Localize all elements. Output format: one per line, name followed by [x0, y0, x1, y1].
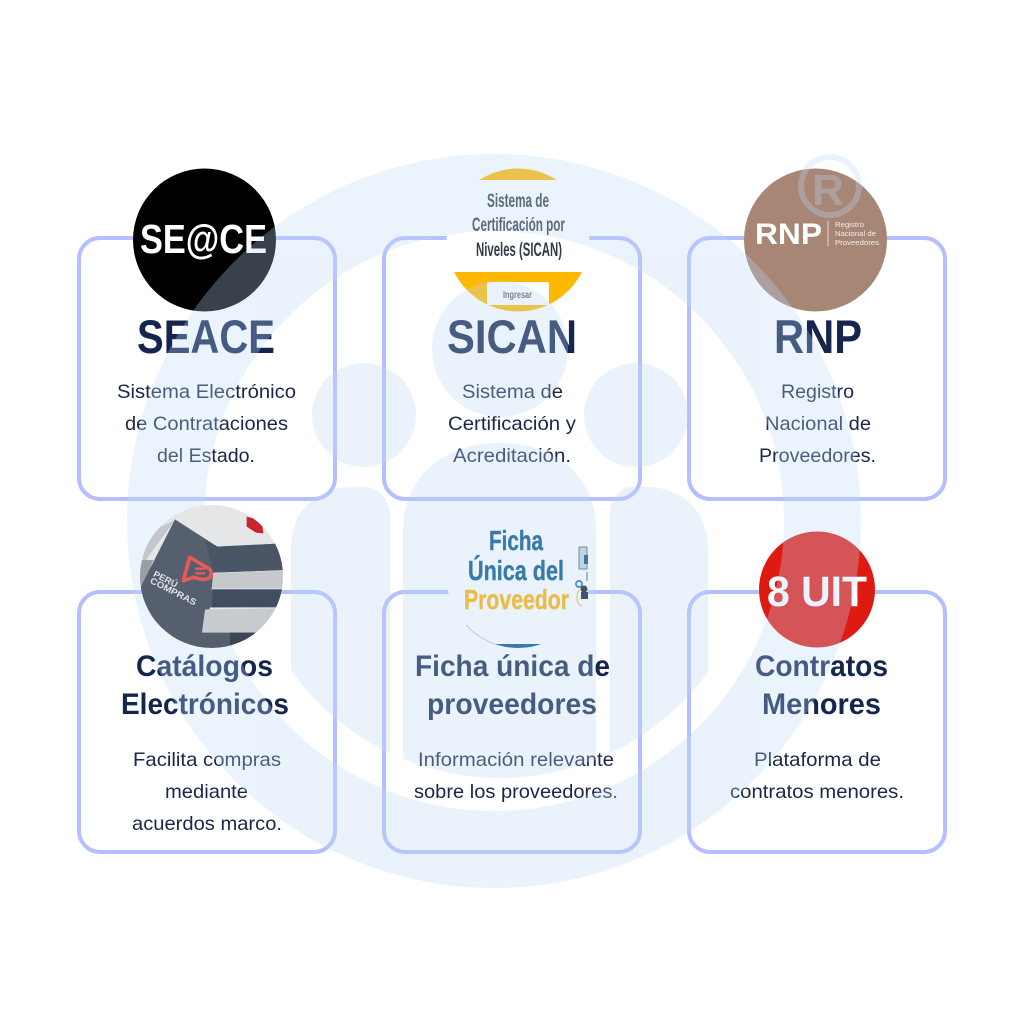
card: Ficha única de proveedores: [384, 505, 640, 852]
description: Contratos Menores: Plataforma de: [754, 749, 881, 771]
card: SICAN: [384, 165, 640, 499]
heading: Catálogos Electrónicos: Electrónicos: [121, 688, 289, 721]
card: Contratos Menores: [689, 532, 945, 852]
description: RNP: [759, 381, 876, 467]
heading: Ficha única de proveedores: proveedores: [427, 688, 597, 721]
logo: RNP: [744, 168, 887, 312]
logo: Ficha Única del Proveedor: Única del: [468, 555, 564, 586]
description: Contratos Menores: contratos menores.: [730, 781, 904, 803]
icon: document and person: [576, 547, 588, 606]
logo: SICAN: [446, 168, 590, 312]
description: SEACE: [117, 381, 296, 467]
logo: Ficha Única del Proveedor: Ficha: [489, 525, 543, 556]
logo: Ficha Única del Proveedor: [448, 530, 588, 648]
description: SEACE: del Estado.: [157, 445, 255, 467]
logo: 8 UIT: [759, 532, 875, 648]
card: SEACE: [79, 168, 335, 499]
logo: SICAN: Niveles (SICAN): [476, 240, 562, 261]
heading: Ficha única de proveedores: Ficha única de: [415, 650, 610, 683]
heading: Catálogos Electrónicos: [121, 650, 289, 721]
card: Catálogos Electrónicos: [79, 592, 335, 852]
description: Catálogos Electrónicos: [132, 749, 282, 835]
heading: Contratos Menores: Contratos: [755, 650, 888, 683]
heading: Ficha única de proveedores: [415, 650, 610, 721]
logo: SICAN: Certificación por: [472, 215, 565, 236]
description: RNP: Proveedores.: [759, 445, 876, 467]
logo: SICAN: Ingresar: [503, 290, 532, 301]
logo: RNP: Proveedores: [835, 240, 880, 247]
heading: Contratos Menores: Menores: [762, 688, 881, 721]
description: SEACE: Sistema Electrónico: [117, 381, 296, 403]
heading: SEACE: SEACE: [137, 310, 275, 363]
logo: building photo: PERÚ: [152, 568, 180, 590]
description: SICAN: Acreditación.: [453, 445, 571, 467]
logo: building photo: [140, 505, 283, 648]
heading: Contratos Menores: [755, 650, 888, 721]
infographic: [77, 154, 947, 888]
logo: SICAN: Sistema de: [487, 191, 549, 212]
heading: Catálogos Electrónicos: Catálogos: [136, 650, 273, 683]
icon: Perú Compras logo mark: [183, 557, 211, 581]
logo: RNP: RNP: [755, 218, 822, 251]
logo: building photo: COMPRAS: [148, 576, 198, 607]
logo: 8 UIT: 8 UIT: [767, 568, 867, 616]
description: Ficha única de proveedores: Información relevante: [418, 749, 614, 771]
description: SICAN: [448, 381, 576, 467]
description: Contratos Menores: [730, 749, 904, 803]
description: SICAN: Sistema de: [462, 381, 563, 403]
watermark: registered people logo: [127, 154, 862, 888]
description: Catálogos Electrónicos: mediante: [165, 781, 248, 803]
description: Ficha única de proveedores: sobre los proveedores.: [414, 781, 618, 803]
card: RNP: [689, 168, 945, 499]
description: RNP: Registro: [781, 381, 854, 403]
description: Ficha única de proveedores: [414, 749, 618, 803]
logo: RNP: Nacional de: [835, 231, 876, 238]
description: RNP: Nacional de: [765, 413, 871, 435]
watermark: registered people logo: R: [812, 166, 844, 215]
heading: RNP: RNP: [774, 310, 862, 363]
description: Catálogos Electrónicos: acuerdos marco.: [132, 813, 282, 835]
description: SICAN: Certificación y: [448, 413, 576, 435]
logo: SEACE: SE@CE: [140, 216, 267, 262]
logo: Ficha Única del Proveedor: Proveedor: [464, 584, 569, 615]
description: Catálogos Electrónicos: Facilita compras: [133, 749, 281, 771]
description: SEACE: de Contrataciones: [125, 413, 288, 435]
logo: SEACE: [133, 168, 276, 312]
heading: SICAN: SICAN: [447, 310, 577, 363]
logo: RNP: Registro: [835, 222, 864, 229]
